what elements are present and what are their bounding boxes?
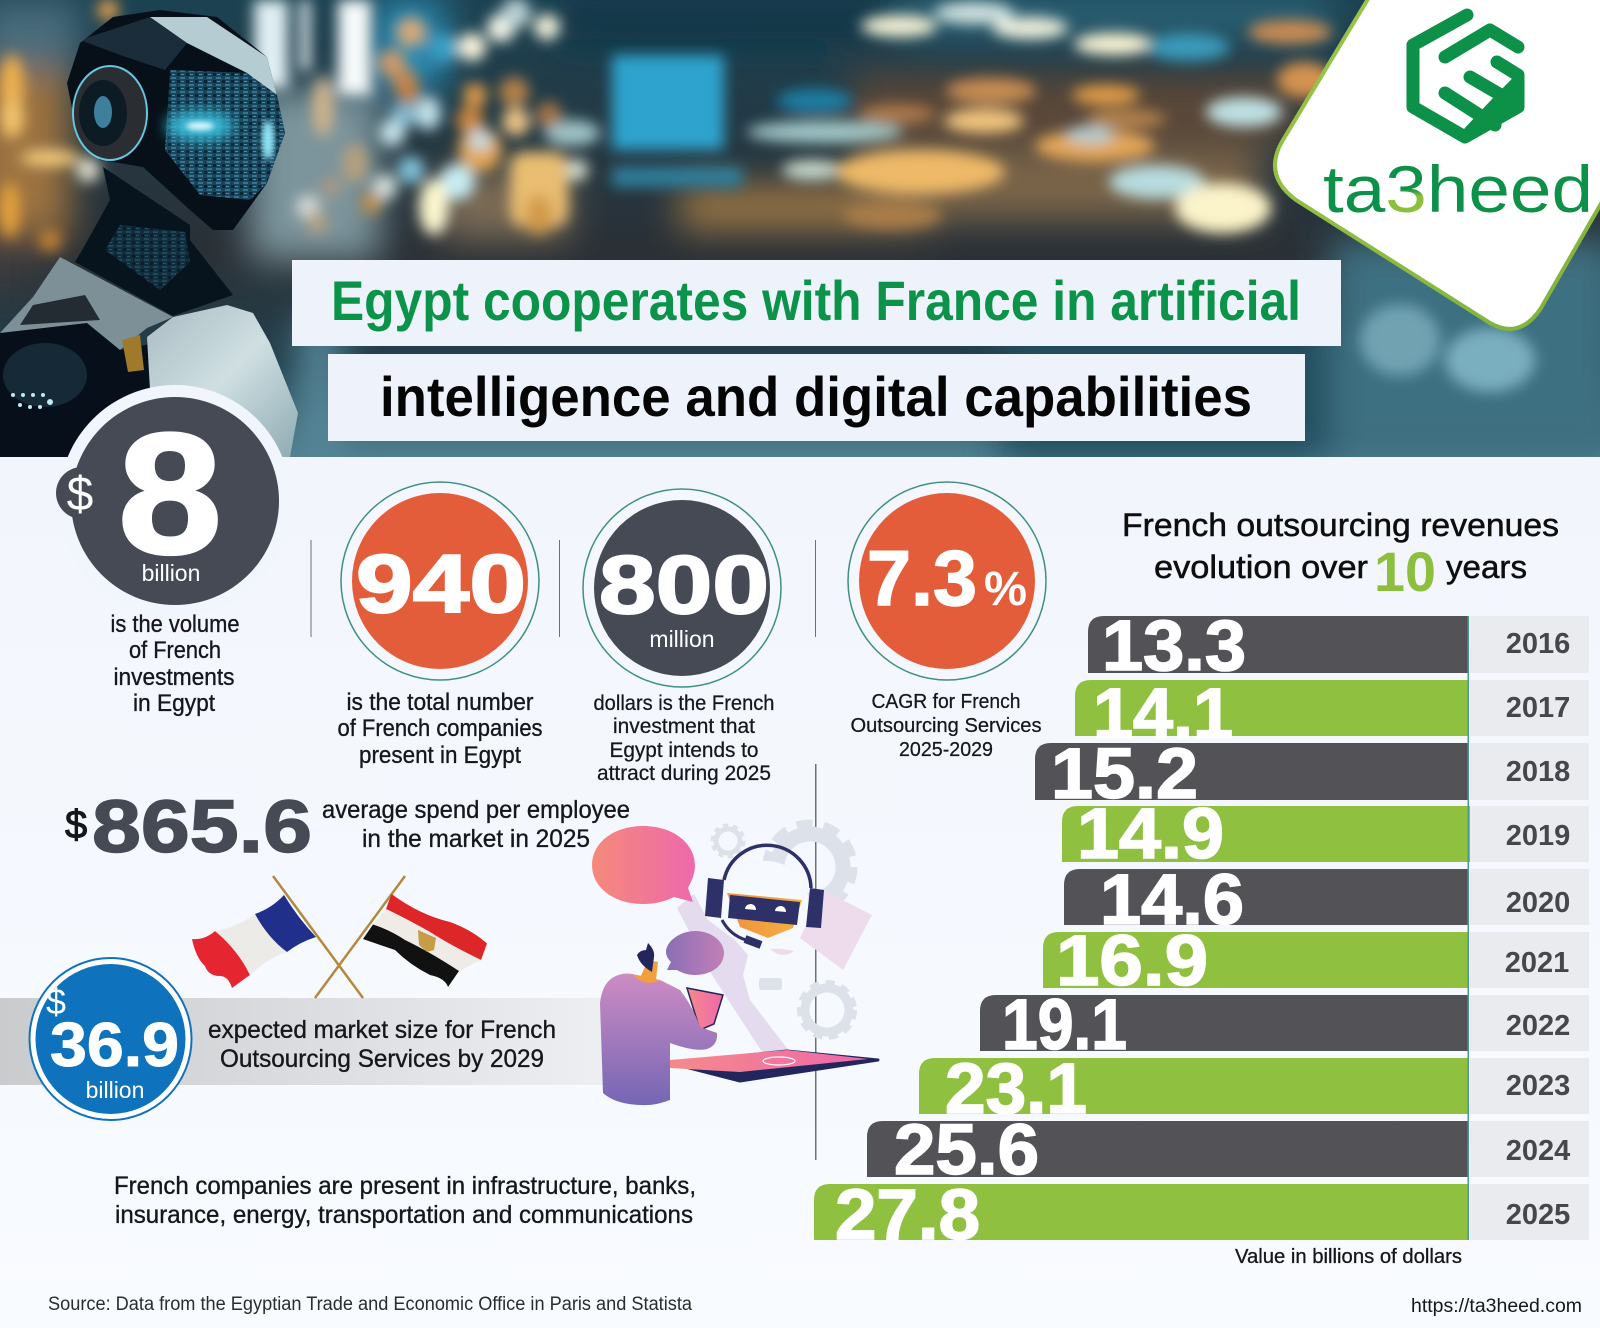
- flags: [192, 876, 487, 998]
- text: CAGR: [850, 691, 1042, 761]
- year 2019: 14.9: [1062, 795, 1589, 874]
- stat: average spend 865.6: 865.6: [92, 785, 312, 868]
- text: number of French companies: [338, 689, 542, 769]
- stat: 800 million: 800: [599, 538, 769, 631]
- stat: 800 million: million: [649, 626, 715, 652]
- stat: 7.3 percent: %: [984, 563, 1027, 616]
- text: CAGR: CAGR for French: [872, 691, 1020, 713]
- text: volume of French investments: investments: [114, 664, 234, 691]
- pale robot body: [677, 861, 872, 1052]
- chart note: Value in billions of dollars: [1235, 1246, 1462, 1268]
- year 2020: 14.6: [1064, 861, 1589, 940]
- icon: ta3heed hexagon mark: [1413, 15, 1518, 137]
- year 2024: 25.6: 25.6: [894, 1111, 1039, 1190]
- robot ear piece: [73, 66, 147, 160]
- year 2024: 25.6: [867, 1111, 1589, 1190]
- text: average spend: [322, 796, 630, 853]
- year 2023: 23.1: [919, 1050, 1589, 1129]
- chart heading: years: [1446, 549, 1527, 585]
- text: volume of French investments: [110, 611, 240, 717]
- text: number of French companies: is the total number: [346, 689, 534, 716]
- robot chest plate: [147, 305, 298, 457]
- text: CAGR: 2025-2029: [899, 739, 993, 761]
- dollar badge: $: [67, 468, 93, 521]
- text: average spend: in the market in 2025: [362, 825, 590, 853]
- title line 2: intelligence and digital capabilities: [380, 365, 1252, 428]
- year 2017: 14.1: 2017: [1506, 692, 1570, 724]
- source: Source: Data from the Egyptian Trade and Economic Office in Paris and Statista: [48, 1294, 692, 1315]
- year 2016: 13.3: [1088, 607, 1589, 686]
- divider lines: [310, 540, 816, 1160]
- year 2016: 13.3: 2016: [1506, 628, 1570, 660]
- person: [600, 943, 723, 1105]
- title line 1: [292, 260, 1341, 346]
- text: French investment in 2025: [594, 692, 774, 785]
- year 2018: 15.2: 2018: [1506, 756, 1570, 788]
- text: French investment in 2025: attract during 2025: [597, 762, 771, 785]
- stat: 7.3 percent: [848, 482, 1046, 680]
- number 8: 8: [118, 398, 222, 590]
- title line 1: Egypt cooperates with France in artificial: [331, 269, 1301, 332]
- text: French companies sectors: insurance, energy, transportation and communications: [115, 1201, 693, 1229]
- chart heading: evolution over: [1154, 549, 1368, 585]
- axis line: [1468, 616, 1469, 1240]
- text: French companies sectors: French companies are present in infrastructure, banks,: [114, 1172, 696, 1200]
- year 2023: 23.1: 2023: [1506, 1070, 1570, 1102]
- header photo: robot in a blurred city: [0, 0, 1600, 460]
- year 2020: 14.6: 14.6: [1100, 861, 1244, 940]
- text: number of French companies: present in Egypt: [359, 742, 521, 769]
- text: French investment in 2025: Egypt intends to: [610, 739, 758, 762]
- year 2021: 16.9: 2021: [1505, 947, 1569, 979]
- chart heading: [1122, 507, 1559, 603]
- text: French companies sectors: [114, 1172, 696, 1229]
- text: number of French companies: of French companies: [338, 715, 542, 742]
- stat: 36.9 billion: $: [46, 981, 66, 1022]
- dollar badge: [56, 467, 108, 521]
- year 2022: 19.1: 2022: [1506, 1010, 1570, 1042]
- text: CAGR: Outsourcing Services: [850, 715, 1042, 737]
- year 2020: 14.6: 2020: [1506, 887, 1570, 919]
- unit: billion: [142, 560, 200, 586]
- flag of Egypt: [315, 876, 487, 998]
- bokeh dots centre: [396, 17, 426, 47]
- year 2025: 27.8: 2025: [1506, 1199, 1570, 1231]
- stat: 800 million: [583, 489, 781, 687]
- text: French investment in 2025: dollars is the French: [594, 692, 774, 715]
- robot shoulder strap: [0, 257, 173, 372]
- text: volume of French investments: in Egypt: [133, 690, 215, 717]
- robot shoulder lights: [11, 393, 53, 409]
- robot figure: [0, 5, 298, 457]
- year 2021: 16.9: [1043, 922, 1589, 1001]
- website: https://ta3heed.com: [1411, 1296, 1582, 1317]
- text: expected market size: expected market size for French: [208, 1016, 556, 1044]
- year 2018: 15.2: [1035, 735, 1589, 814]
- text: expected market size: Outsourcing Services by 2029: [220, 1045, 544, 1073]
- bar chart: revenues by year: [814, 607, 1589, 1255]
- stat: 36.9 billion: 36.9: [50, 1011, 179, 1080]
- year 2016: 13.3: 13.3: [1102, 607, 1246, 686]
- speech bubble purple: [666, 931, 724, 975]
- year 2019: 14.9: 14.9: [1077, 795, 1224, 874]
- text: French investment in 2025: investment that: [613, 715, 755, 738]
- illustration: person talking with a robot: [592, 824, 878, 1105]
- bokeh ovals right: [861, 15, 937, 37]
- logo panel: [1275, 0, 1600, 329]
- year 2022: 19.1: 19.1: [1002, 986, 1127, 1065]
- robot eye glow: [166, 111, 274, 160]
- gears: [713, 824, 854, 1037]
- chart heading: French outsourcing revenues: [1122, 507, 1559, 543]
- year 2021: 16.9: 16.9: [1056, 922, 1208, 1001]
- flat tablet: [670, 1050, 878, 1081]
- text: volume of French investments: of French: [129, 637, 221, 664]
- chart heading: 10: [1374, 540, 1436, 603]
- year 2017: 14.1: [1075, 675, 1589, 754]
- stat: 940 companies: [341, 482, 539, 680]
- title line 2: [328, 354, 1305, 441]
- flag of France: [192, 876, 363, 998]
- year 2017: 14.1: 14.1: [1093, 675, 1233, 754]
- year 2019: 14.9: 2019: [1506, 820, 1570, 852]
- robot head with headset: [705, 845, 824, 945]
- year 2024: 25.6: 2024: [1506, 1135, 1570, 1167]
- year 2025: 27.8: [814, 1176, 1589, 1255]
- stat: average spend 865.6: $: [65, 803, 87, 847]
- stat: 36.9 billion: [30, 958, 192, 1120]
- text: expected market size: [208, 1016, 556, 1073]
- text: average spend: average spend per employee: [322, 796, 630, 824]
- year 2023: 23.1: 23.1: [945, 1050, 1087, 1129]
- robot neck: [75, 167, 233, 316]
- stat: 8 billion: [56, 385, 291, 617]
- grey band: [0, 998, 640, 1085]
- year 2022: 19.1: [980, 986, 1589, 1065]
- stat: 7.3 percent: 7.3: [867, 534, 977, 622]
- robot head: [60, 5, 290, 235]
- year 2025: 27.8: 27.8: [835, 1176, 980, 1255]
- year 2018: 15.2: 15.2: [1051, 735, 1198, 814]
- stat: 36.9 billion: billion: [86, 1077, 144, 1103]
- stat: 940 companies: 940: [356, 537, 526, 630]
- robot shoulder: [0, 323, 150, 457]
- text: volume of French investments: is the volume: [110, 611, 240, 638]
- large panels: [300, 0, 310, 70]
- speech bubble pink: [592, 826, 695, 904]
- logo wordmark: ta3heed: [1323, 152, 1593, 226]
